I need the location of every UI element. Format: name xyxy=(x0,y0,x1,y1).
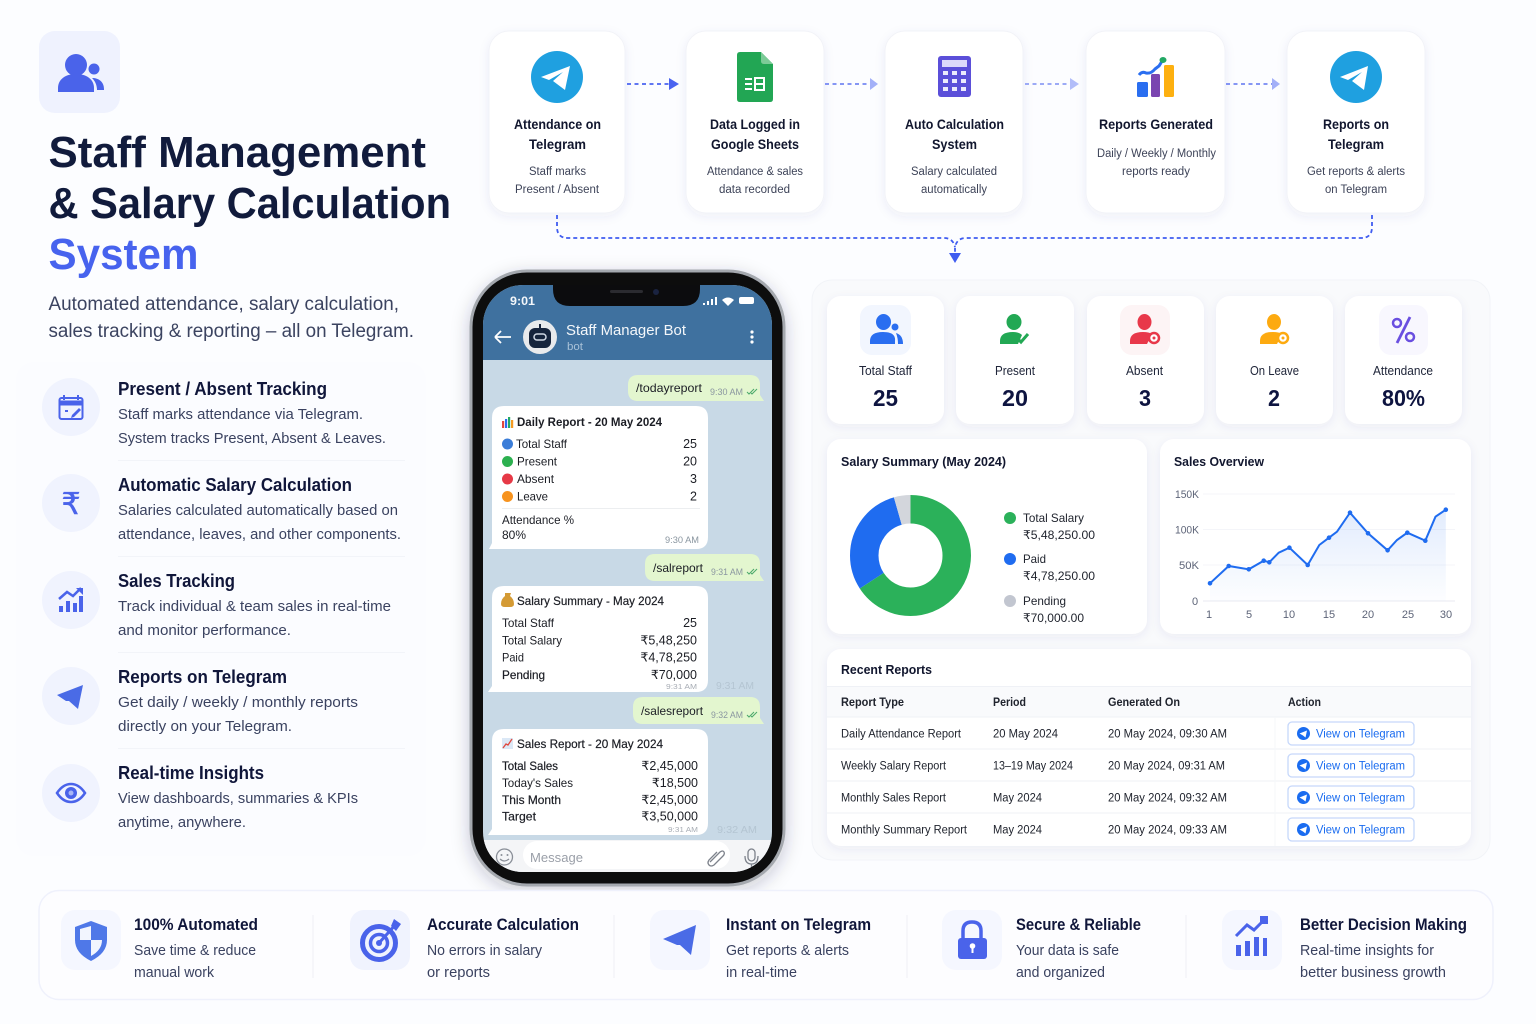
table row: daily attendance xyxy=(841,722,1414,745)
chat: sales report message: ₹3,50,000 xyxy=(641,810,698,824)
chat: sales report message: 9:31 AM xyxy=(668,827,698,834)
subtitle: Automated attendance, salary calculation, xyxy=(48,294,399,315)
chat: todayreport command: 9:30 AM xyxy=(710,387,743,397)
flow card: reports on telegram: Telegram xyxy=(1328,136,1384,152)
flow card: data logged in google sheets xyxy=(686,31,824,213)
feature: automatic salary calculation: Automatic Salary Calculation xyxy=(118,475,352,495)
panel: sales overview: 25 xyxy=(1402,609,1414,621)
benefit: secure and reliable: Your data is safe xyxy=(1016,943,1119,959)
chat: salesreport command: /salesreport xyxy=(641,704,704,718)
chat: salary summary message: Total Staff xyxy=(502,616,555,630)
stat card: present: Present xyxy=(995,364,1035,378)
flow card: data logged in google sheets: Data Logged in xyxy=(710,116,800,132)
flow card: data logged in google sheets: Attendance & sales xyxy=(707,166,803,178)
feature: sales tracking xyxy=(42,571,391,639)
flow card: auto calculation system: automatically xyxy=(921,184,987,196)
benefit: better decision making: better business growth xyxy=(1300,965,1446,981)
chat: daily report message: Present xyxy=(517,454,558,468)
panel: recent reports xyxy=(827,649,1471,846)
chat: todayreport command: /todayreport xyxy=(636,381,703,395)
chat: salary summary message: 9:31 AM xyxy=(666,684,697,691)
flow card: attendance on telegram: Telegram xyxy=(529,136,586,152)
flow card: attendance on telegram xyxy=(489,31,625,213)
benefit: 100% automated: manual work xyxy=(134,965,215,981)
chat: salesreport command xyxy=(633,697,764,724)
subtitle: sales tracking & reporting – all on Telegram. xyxy=(48,321,414,342)
chat: daily report message xyxy=(489,406,708,549)
stat card: attendance: 80% xyxy=(1382,385,1425,411)
chat: daily report message: 9:30 AM xyxy=(665,535,699,545)
flow card: auto calculation system xyxy=(885,31,1023,213)
flow card: data logged in google sheets: data recorded xyxy=(719,184,790,196)
chat: sales report message: Sales Report - 20 May 2024 xyxy=(517,737,663,751)
chat: salesreport command: 9:32 AM xyxy=(711,710,743,720)
donut legend: Total Salary xyxy=(1023,511,1084,525)
stat card: on leave: On Leave xyxy=(1250,364,1299,378)
title: Staff Management xyxy=(48,128,426,177)
table row: weekly salary xyxy=(841,754,1414,777)
table row: weekly salary: 13–19 May 2024 xyxy=(993,760,1074,772)
phone header: Staff Manager Bot xyxy=(566,323,686,339)
chat: salary summary message xyxy=(488,586,754,692)
table row: daily attendance: View on Telegram xyxy=(1316,728,1405,740)
feature: present absent tracking: Present / Absent Tracking xyxy=(118,379,327,399)
feature: present absent tracking: System tracks Present, Absent & Leaves. xyxy=(118,430,386,447)
feature: reports on telegram xyxy=(42,667,358,735)
feature: automatic salary calculation xyxy=(42,474,401,543)
feature: real-time insights: View dashboards, summaries & KPIs xyxy=(118,790,358,807)
panel: sales overview: 150K xyxy=(1175,489,1200,501)
table row: weekly salary: View on Telegram xyxy=(1316,760,1405,772)
panel: recent reports: Recent Reports xyxy=(841,662,932,677)
table row: monthly summary: View on Telegram xyxy=(1316,824,1405,836)
benefit: better decision making xyxy=(1222,910,1467,981)
chat: salreport command: 9:31 AM xyxy=(711,567,743,577)
table row: monthly sales: 20 May 2024, 09:32 AM xyxy=(1108,792,1227,804)
chat: daily report message: 20 xyxy=(683,454,697,468)
chat: sales report message: ₹2,45,000 xyxy=(641,793,698,807)
benefit: instant on telegram xyxy=(650,910,871,981)
panel: sales overview: 1 xyxy=(1206,609,1212,621)
chat: salary summary message: Pending xyxy=(502,668,545,682)
donut legend: ₹5,48,250.00 xyxy=(1023,528,1095,542)
benefit: accurate calculation: No errors in salary xyxy=(427,943,543,959)
table header: Report Type xyxy=(841,697,904,709)
benefit: instant on telegram: Instant on Telegram xyxy=(726,916,871,934)
chat: salary summary message: ₹5,48,250 xyxy=(640,634,697,648)
panel: sales overview: 50K xyxy=(1179,560,1200,572)
flow card: attendance on telegram: Staff marks xyxy=(529,166,586,178)
arrow: telegram to sheets xyxy=(627,78,679,90)
donut legend xyxy=(1004,511,1095,625)
feature: sales tracking: Sales Tracking xyxy=(118,571,235,591)
table row: monthly summary: May 2024 xyxy=(993,824,1043,836)
panel: sales overview: 5 xyxy=(1246,609,1252,621)
benefit: secure and reliable: and organized xyxy=(1016,965,1105,981)
benefit: secure and reliable xyxy=(942,910,1141,981)
chat: salary summary message: Salary Summary - May 2024 xyxy=(517,594,664,608)
phone header: bot xyxy=(567,341,583,353)
feature: real-time insights: Real-time Insights xyxy=(118,763,264,783)
donut legend: Pending xyxy=(1023,594,1066,608)
panel: sales overview: 20 xyxy=(1362,609,1374,621)
stat card: total staff xyxy=(827,296,944,424)
table row: monthly sales: May 2024 xyxy=(993,792,1043,804)
table row: daily attendance: Daily Attendance Report xyxy=(841,728,962,740)
title: System xyxy=(48,230,198,279)
stat card: present xyxy=(956,296,1074,424)
table row: weekly salary: Weekly Salary Report xyxy=(841,760,947,772)
chat: salreport command: /salreport xyxy=(653,561,704,575)
flow card: reports generated xyxy=(1086,31,1225,213)
table row: weekly salary: 20 May 2024, 09:31 AM xyxy=(1108,760,1225,772)
table row: monthly summary: 20 May 2024, 09:33 AM xyxy=(1108,824,1227,836)
table row: monthly sales xyxy=(841,786,1414,809)
benefit: accurate calculation: or reports xyxy=(427,965,490,981)
chat: sales report message: This Month xyxy=(502,793,561,807)
chat: message input bar xyxy=(483,840,772,872)
icon: staff app tile xyxy=(39,31,120,113)
donut legend: ₹70,000.00 xyxy=(1023,611,1084,625)
flow card: reports on telegram: on Telegram xyxy=(1325,184,1387,196)
chat: sales report message: ₹18,500 xyxy=(652,776,698,790)
chat: salary summary message: Total Salary xyxy=(502,634,562,648)
benefit: accurate calculation xyxy=(350,910,579,981)
benefit: instant on telegram: in real-time xyxy=(726,965,797,981)
chat: daily report message: Total Staff xyxy=(516,437,568,451)
chat: daily report message: 3 xyxy=(690,472,697,486)
feature: present absent tracking: Staff marks attendance via Telegram. xyxy=(118,406,363,423)
line chart xyxy=(1208,507,1448,601)
chat: daily report message: Attendance % xyxy=(502,513,574,527)
flow card: reports on telegram: Get reports & alerts xyxy=(1307,166,1405,178)
stat card: present: 20 xyxy=(1002,385,1028,411)
chat: sales report message: Total Sales xyxy=(502,759,558,773)
stat card: total staff: Total Staff xyxy=(859,364,913,378)
arrow: sheets to calculation xyxy=(825,78,878,90)
table header: Generated On xyxy=(1108,697,1180,709)
feature: present absent tracking xyxy=(42,378,386,447)
benefit: 100% automated xyxy=(61,910,258,981)
benefit: secure and reliable: Secure & Reliable xyxy=(1016,916,1141,934)
flow card: data logged in google sheets: Google Sheets xyxy=(711,136,799,152)
stat card: absent: 3 xyxy=(1139,385,1151,411)
table row: daily attendance: 20 May 2024, 09:30 AM xyxy=(1108,728,1227,740)
stat card: attendance: Attendance xyxy=(1373,364,1433,378)
phone header: 9:01 xyxy=(510,294,535,308)
chat: salreport command xyxy=(645,554,764,581)
flow card: reports generated: reports ready xyxy=(1122,166,1190,178)
stat card: on leave: 2 xyxy=(1268,385,1280,411)
feature: automatic salary calculation: Salaries calculated automatically based on xyxy=(118,502,398,519)
feature: automatic salary calculation: attendance, leaves, and other components. xyxy=(118,526,401,543)
table row: monthly sales: View on Telegram xyxy=(1316,792,1405,804)
panel: features list xyxy=(16,362,426,856)
stat card: attendance xyxy=(1345,296,1462,424)
benefit: 100% automated: 100% Automated xyxy=(134,916,258,934)
feature: real-time insights xyxy=(42,763,358,831)
chat: salary summary message: ₹4,78,250 xyxy=(640,650,697,664)
flow card: attendance on telegram: Present / Absent xyxy=(515,184,600,196)
panel: sales overview: 100K xyxy=(1175,524,1200,536)
arrow: connector to dashboard xyxy=(557,215,1372,263)
chat: daily report message: Leave xyxy=(517,490,548,504)
chat: sales report message: Today's Sales xyxy=(502,776,573,790)
feature: reports on telegram: directly on your Telegram. xyxy=(118,718,292,735)
chat: daily report message: 25 xyxy=(683,437,697,451)
chat: salary summary message: 9:31 AM xyxy=(716,681,754,692)
arrow: reports to telegram xyxy=(1226,78,1280,90)
stat card: absent xyxy=(1087,296,1204,424)
feature: sales tracking: Track individual & team sales in real-time xyxy=(118,598,391,615)
phone mockup xyxy=(471,271,784,885)
panel: sales overview xyxy=(1160,439,1471,634)
feature: sales tracking: and monitor performance. xyxy=(118,622,291,639)
donut legend: Paid xyxy=(1023,552,1046,566)
feature: reports on telegram: Get daily / weekly / monthly reports xyxy=(118,694,358,711)
chat: salary summary message: Paid xyxy=(502,650,524,664)
table row: daily attendance: 20 May 2024 xyxy=(993,728,1059,740)
flow card: auto calculation system: Salary calculated xyxy=(911,166,997,178)
panel: dashboard xyxy=(812,280,1490,860)
feature: real-time insights: anytime, anywhere. xyxy=(118,814,246,831)
arrow: calculation to reports xyxy=(1025,78,1079,90)
benefit: accurate calculation: Accurate Calculation xyxy=(427,916,579,934)
table header xyxy=(841,697,1321,709)
donut chart xyxy=(864,509,957,602)
stat card: on leave xyxy=(1216,296,1333,424)
flow card: attendance on telegram: Attendance on xyxy=(514,116,601,132)
chat: daily report message: Daily Report - 20 May 2024 xyxy=(517,415,662,429)
flow card: reports generated: Reports Generated xyxy=(1099,116,1213,132)
chat: salary summary message: 25 xyxy=(683,616,697,630)
chat: salary summary message: ₹70,000 xyxy=(651,668,697,682)
chat: message input bar: Message xyxy=(530,850,583,865)
panel: sales overview: Sales Overview xyxy=(1174,454,1265,469)
chat: daily report message: 2 xyxy=(690,490,697,504)
feature: reports on telegram: Reports on Telegram xyxy=(118,667,287,687)
panel: sales overview: 0 xyxy=(1192,596,1198,608)
panel: sales overview: 15 xyxy=(1323,609,1335,621)
table row: monthly summary xyxy=(841,818,1414,841)
flow card: auto calculation system: System xyxy=(932,136,977,152)
panel: salary summary: Salary Summary (May 2024) xyxy=(841,454,1006,469)
flow card: auto calculation system: Auto Calculation xyxy=(905,116,1004,132)
panel: salary summary xyxy=(827,439,1147,634)
chat: sales report message: ₹2,45,000 xyxy=(641,759,698,773)
chat: todayreport command xyxy=(628,375,764,401)
flow card: reports on telegram: Reports on xyxy=(1323,116,1389,132)
chat: sales report message: Target xyxy=(502,810,537,824)
panel: benefits strip xyxy=(39,890,1493,1000)
chat: sales report message: 9:32 AM xyxy=(717,825,757,836)
phone notch xyxy=(553,285,700,306)
chat: daily report message: Absent xyxy=(517,472,555,486)
benefit: better decision making: Real-time insights for xyxy=(1300,943,1434,959)
table header: Action xyxy=(1288,697,1321,709)
flow card: reports generated: Daily / Weekly / Monthly xyxy=(1097,148,1216,160)
stat card: total staff: 25 xyxy=(873,385,898,411)
table header: Period xyxy=(993,697,1026,709)
title: & Salary Calculation xyxy=(48,179,451,228)
panel: sales overview: 30 xyxy=(1440,609,1452,621)
phone header xyxy=(483,285,772,360)
subtitle xyxy=(48,294,414,342)
flow card: reports on telegram xyxy=(1287,31,1425,213)
table row: monthly sales: Monthly Sales Report xyxy=(841,792,947,804)
donut legend: ₹4,78,250.00 xyxy=(1023,569,1095,583)
benefit: 100% automated: Save time & reduce xyxy=(134,943,256,959)
title xyxy=(48,128,451,279)
panel: sales overview: 10 xyxy=(1283,609,1295,621)
benefit: better decision making: Better Decision Making xyxy=(1300,916,1467,934)
chat: sales report message xyxy=(488,729,757,836)
chat: daily report message: 80% xyxy=(502,528,526,542)
stat card: absent: Absent xyxy=(1126,364,1163,378)
benefit: instant on telegram: Get reports & alerts xyxy=(726,943,849,959)
feature: automatic salary calculation: ₹ xyxy=(61,488,81,521)
table row: monthly summary: Monthly Summary Report xyxy=(841,824,968,836)
